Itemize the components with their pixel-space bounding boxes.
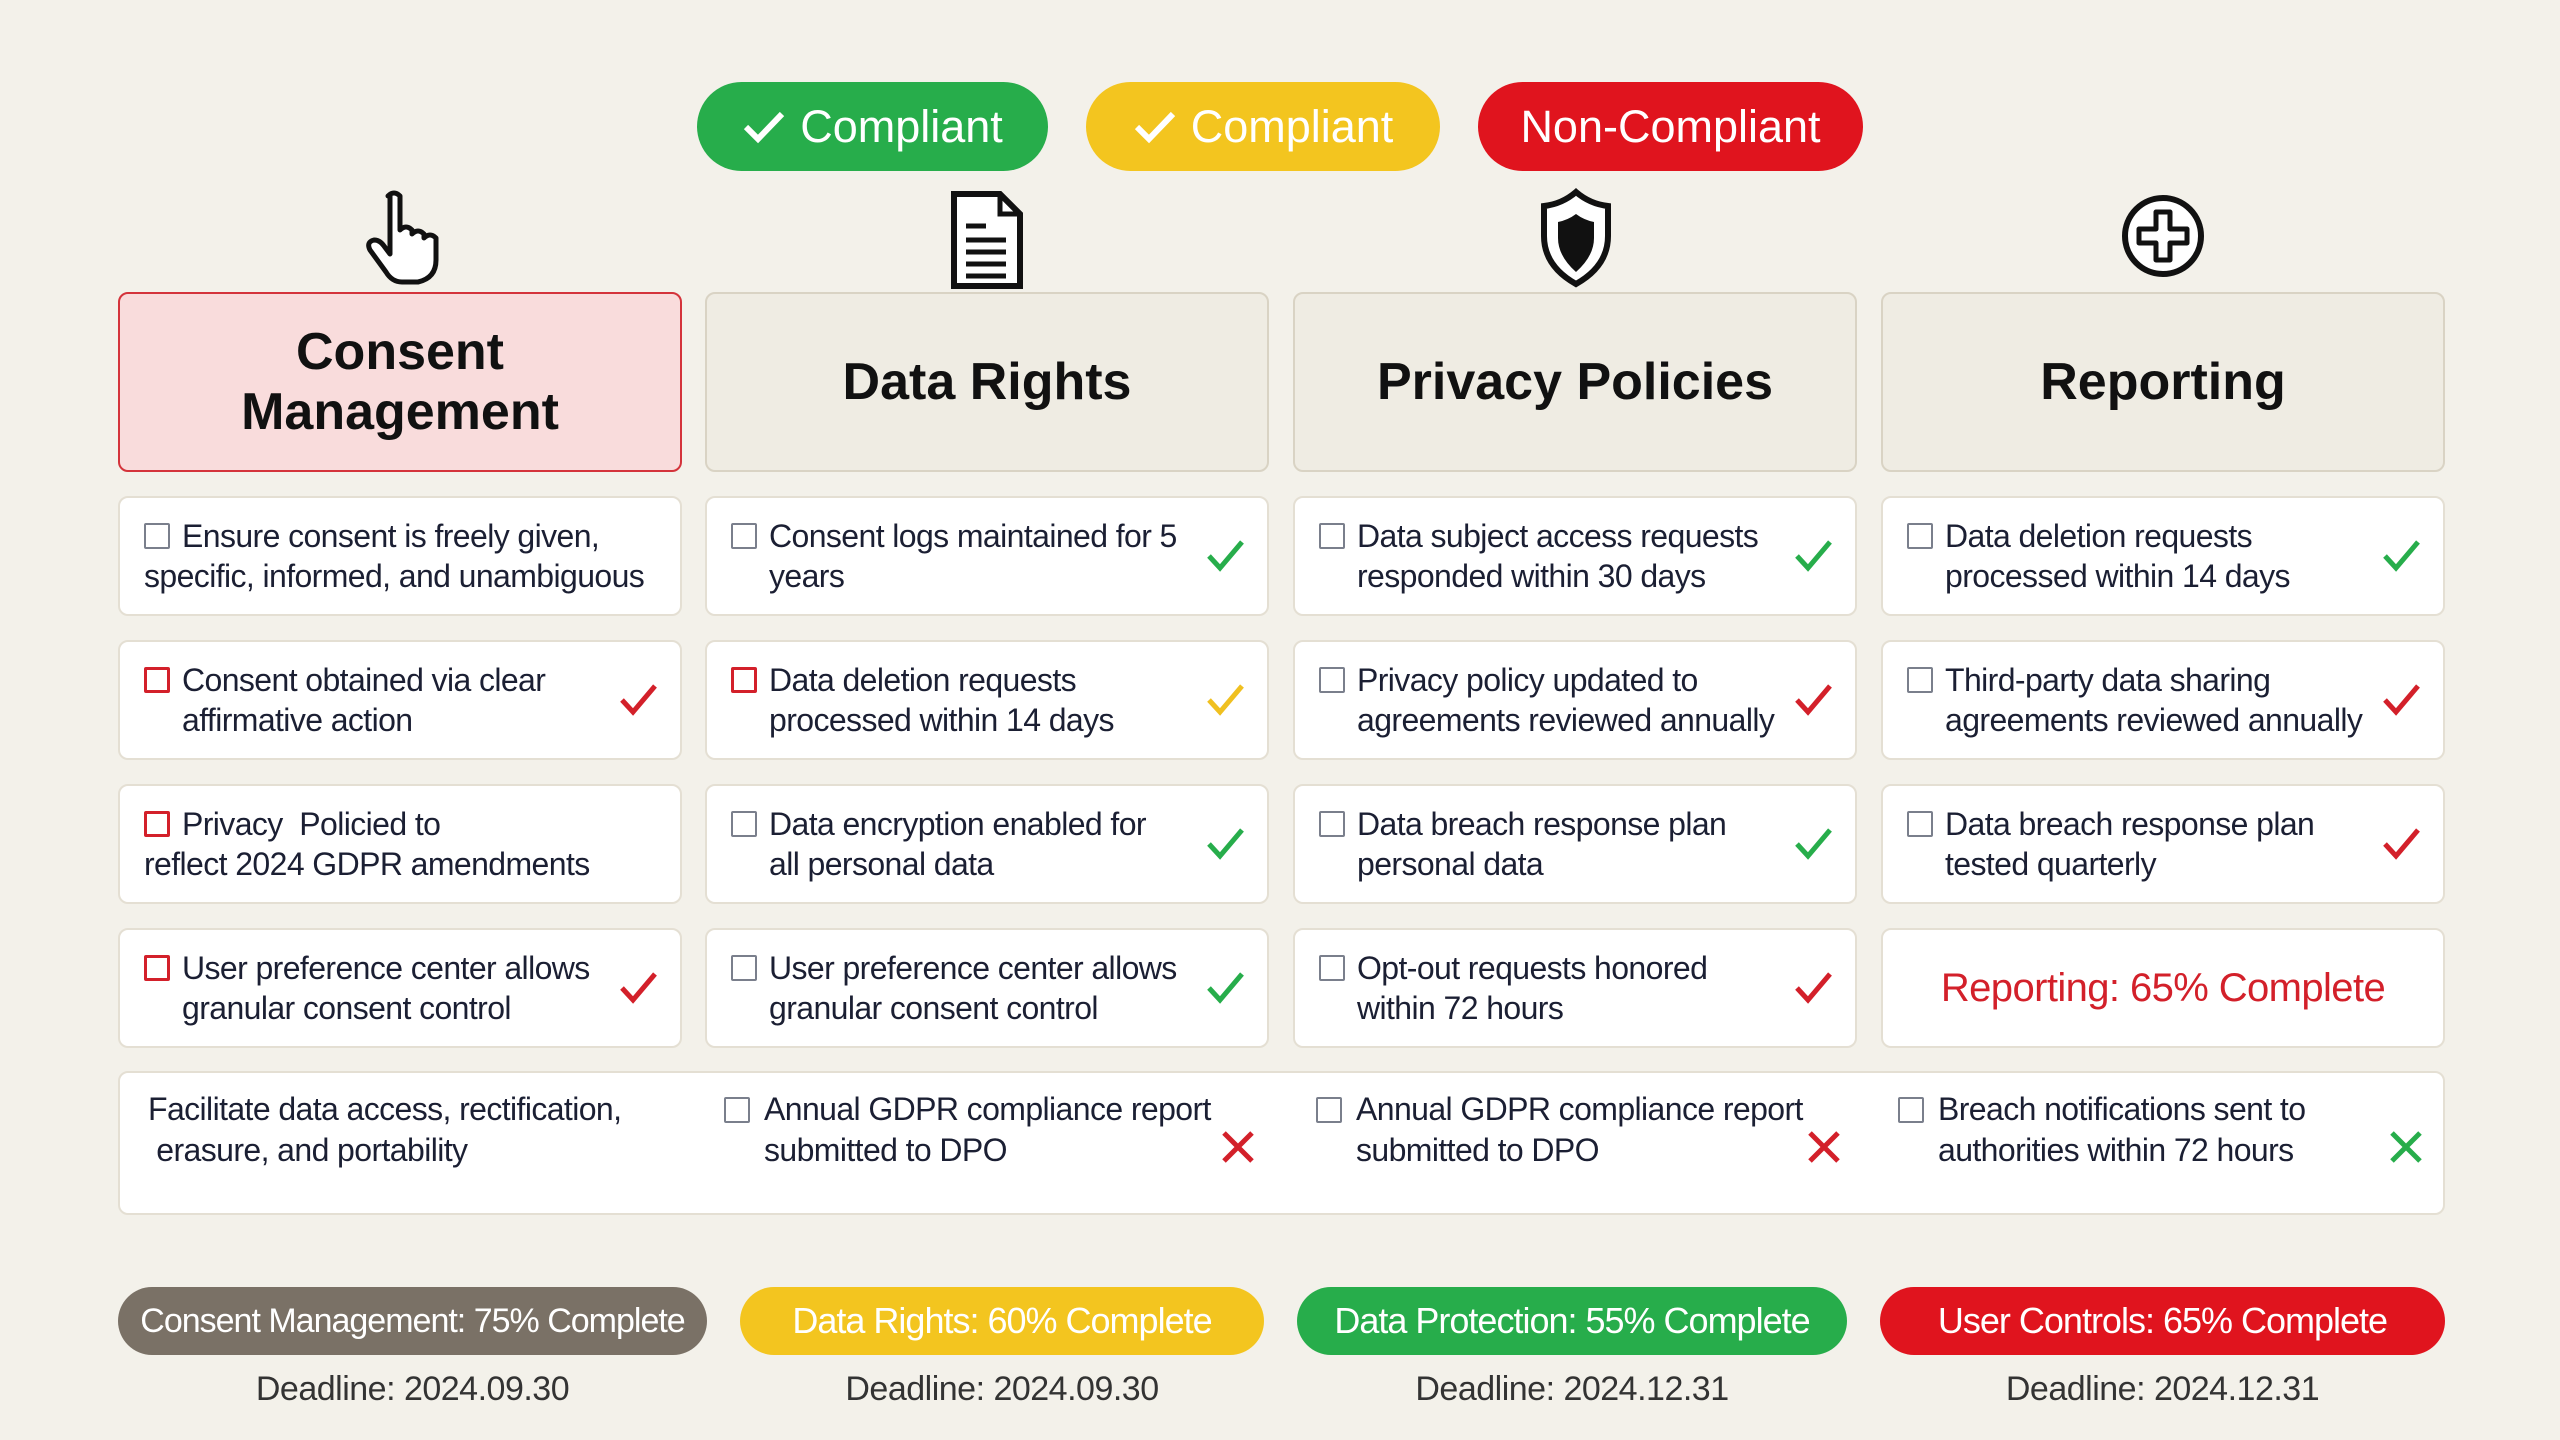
pill: user controls progress: User Controls: 65% Complete bbox=[1938, 1300, 2387, 1341]
item: annual report 1: Annual GDPR compliance report bbox=[764, 1091, 1211, 1127]
item: all personal data bbox=[769, 846, 994, 882]
item: Privacy policy updated to bbox=[1357, 662, 1698, 698]
item bbox=[1881, 496, 2445, 616]
item bbox=[705, 640, 1269, 760]
column 1 items bbox=[118, 496, 682, 1048]
pill: consent management progress bbox=[118, 1287, 707, 1355]
badge: compliant green bbox=[697, 82, 1048, 171]
icon: plus circle bbox=[2122, 195, 2204, 277]
item: years bbox=[769, 558, 844, 594]
header: consent management: Consent bbox=[296, 323, 504, 381]
item: processed within 14 days bbox=[769, 702, 1114, 738]
item: tested quarterly bbox=[1945, 846, 2156, 882]
item: Data breach response plan bbox=[1945, 806, 2314, 842]
item: specific, informed, and unambiguous bbox=[144, 558, 644, 594]
text: facilitate: erasure, and portability bbox=[156, 1132, 467, 1168]
item: annual report 2 bbox=[1316, 1091, 1840, 1168]
deadline 4: Deadline: 2024.12.31 bbox=[2006, 1370, 2319, 1408]
pill: user controls progress bbox=[1880, 1287, 2445, 1355]
item bbox=[1293, 640, 1857, 760]
text: facilitate bbox=[148, 1091, 621, 1168]
item: agreements reviewed annually bbox=[1357, 702, 1774, 738]
item: granular consent control bbox=[182, 990, 511, 1026]
item: Data subject access requests bbox=[1357, 518, 1758, 554]
item bbox=[1293, 928, 1857, 1048]
item: Data breach response plan bbox=[1357, 806, 1726, 842]
header: data rights: Data Rights bbox=[843, 353, 1131, 411]
item: annual report 2: Annual GDPR compliance report bbox=[1356, 1091, 1803, 1127]
item: responded within 30 days bbox=[1357, 558, 1706, 594]
badge: compliant yellow bbox=[1086, 82, 1440, 171]
header: data rights bbox=[705, 292, 1269, 472]
header: reporting: Reporting bbox=[2040, 353, 2286, 411]
deadline 1: Deadline: 2024.09.30 bbox=[256, 1370, 569, 1408]
item bbox=[705, 496, 1269, 616]
icon: hand pointer bbox=[366, 190, 438, 284]
deadline 3: Deadline: 2024.12.31 bbox=[1415, 1370, 1729, 1408]
item bbox=[1881, 640, 2445, 760]
item: Opt-out requests honored bbox=[1357, 950, 1707, 986]
item: personal data bbox=[1357, 846, 1543, 882]
item: Data deletion requests bbox=[1945, 518, 2252, 554]
item: Third-party data sharing bbox=[1945, 662, 2270, 698]
item: within 72 hours bbox=[1357, 990, 1563, 1026]
item: Privacy Policied to bbox=[182, 806, 440, 842]
item: Consent obtained via clear bbox=[182, 662, 545, 698]
header: privacy policies: Privacy Policies bbox=[1377, 353, 1773, 411]
column 4 items bbox=[1881, 496, 2445, 1048]
item bbox=[1293, 496, 1857, 616]
item: annual report 1 bbox=[724, 1091, 1254, 1168]
item: Ensure consent is freely given, bbox=[182, 518, 599, 554]
item: breach notifications bbox=[1898, 1091, 2422, 1168]
column 3 items bbox=[1293, 496, 1857, 1048]
badge: non-compliant: Non-Compliant bbox=[1520, 100, 1821, 152]
item: User preference center allows bbox=[182, 950, 590, 986]
badge: non-compliant bbox=[1478, 82, 1863, 171]
item: annual report 1: submitted to DPO bbox=[764, 1132, 1007, 1168]
item: reflect 2024 GDPR amendments bbox=[144, 846, 590, 882]
item: Consent logs maintained for 5 bbox=[769, 518, 1177, 554]
badge: compliant yellow: Compliant bbox=[1191, 100, 1393, 152]
deadline 2: Deadline: 2024.09.30 bbox=[845, 1370, 1159, 1408]
item: agreements reviewed annually bbox=[1945, 702, 2362, 738]
item: breach notifications: Breach notifications sent to bbox=[1938, 1091, 2305, 1127]
pill: data protection progress: Data Protection: 55% Complete bbox=[1334, 1300, 1810, 1341]
item bbox=[1293, 784, 1857, 904]
icon: document bbox=[951, 191, 1023, 289]
item bbox=[118, 496, 682, 616]
item bbox=[118, 640, 682, 760]
badge: compliant green: Compliant bbox=[800, 100, 1003, 152]
header: consent management bbox=[118, 292, 682, 472]
pill: data rights progress: Data Rights: 60% Complete bbox=[792, 1300, 1212, 1341]
item: affirmative action bbox=[182, 702, 412, 738]
text: facilitate: Facilitate data access, rectification, bbox=[148, 1091, 621, 1127]
item: breach notifications: authorities within 72 hours bbox=[1938, 1132, 2294, 1168]
pill: data rights progress bbox=[740, 1287, 1264, 1355]
header: reporting bbox=[1881, 292, 2445, 472]
item bbox=[1881, 784, 2445, 904]
pill: data protection progress bbox=[1297, 1287, 1847, 1355]
icon: shield bbox=[1541, 188, 1611, 288]
item bbox=[118, 784, 682, 904]
item bbox=[705, 784, 1269, 904]
pill: consent management progress: Consent Management: 75% Complete bbox=[140, 1302, 685, 1340]
wide row bbox=[118, 1071, 2445, 1215]
header: consent management: Management bbox=[241, 383, 559, 441]
reporting status bbox=[1881, 928, 2445, 1048]
item: processed within 14 days bbox=[1945, 558, 2290, 594]
item bbox=[118, 928, 682, 1048]
item bbox=[705, 928, 1269, 1048]
item: granular consent control bbox=[769, 990, 1098, 1026]
header: privacy policies bbox=[1293, 292, 1857, 472]
item: User preference center allows bbox=[769, 950, 1177, 986]
reporting status: Reporting: 65% Complete bbox=[1941, 966, 2385, 1010]
column 2 items bbox=[705, 496, 1269, 1048]
item: Data encryption enabled for bbox=[769, 806, 1146, 842]
item: Data deletion requests bbox=[769, 662, 1076, 698]
item: annual report 2: submitted to DPO bbox=[1356, 1132, 1599, 1168]
